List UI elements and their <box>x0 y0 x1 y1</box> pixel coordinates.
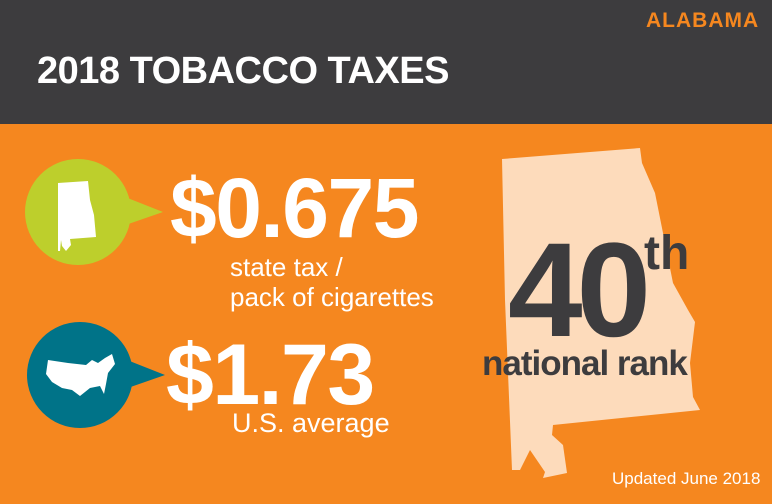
stat: US average: $1.73 <box>166 327 374 423</box>
stat: state tax: pack of cigarettes <box>230 282 434 312</box>
stat: US average: U.S. average <box>232 408 390 438</box>
rank: 40 <box>508 216 645 365</box>
rank: th <box>644 227 689 280</box>
stat: state tax <box>170 161 434 312</box>
title: 2018 TOBACCO TAXES <box>37 50 449 92</box>
state label: ALABAMA <box>646 9 759 32</box>
updated note: Updated June 2018 <box>612 469 760 488</box>
rank <box>482 216 689 383</box>
stat: state tax: $0.675 <box>170 161 418 255</box>
rank: national rank <box>482 344 687 383</box>
stat: state tax: state tax / <box>230 252 343 282</box>
icon: alabama bubble <box>25 159 163 265</box>
icon: US bubble <box>27 322 165 428</box>
header band <box>0 0 772 124</box>
